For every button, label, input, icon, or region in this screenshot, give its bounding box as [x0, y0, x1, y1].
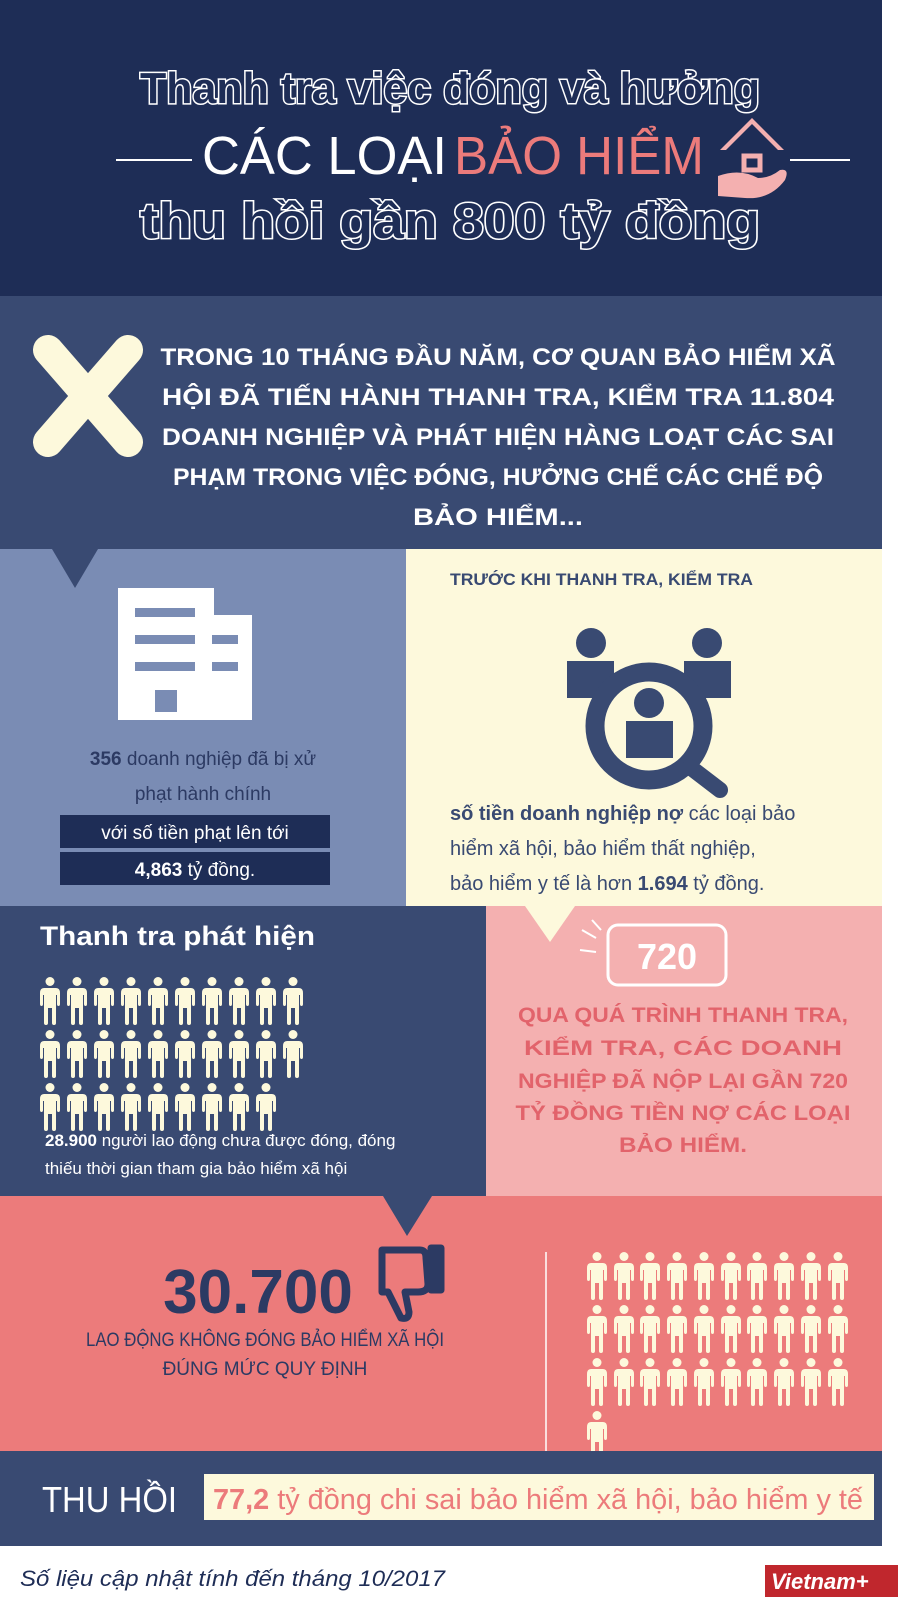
icon: house in hand [718, 118, 787, 198]
intro text: DOANH NGHIỆP VÀ PHÁT HIỆN HÀNG LOẠT CÁC SAI [162, 423, 834, 451]
description: LAO ĐỘNG KHÔNG ĐÓNG BẢO HIỂM XÃ HỘI [86, 1329, 444, 1351]
intro text [160, 342, 836, 531]
title line 1: Thanh tra việc đóng và hưởng [140, 64, 760, 113]
panel: 30.700 workers [0, 1196, 882, 1460]
panel: before inspection [406, 549, 882, 906]
720 box [580, 920, 726, 985]
720 text [516, 1004, 850, 1157]
intro text: HỘI ĐÃ TIẾN HÀNH THANH TRA, KIỂM TRA 11.804 [162, 383, 835, 411]
debt text [450, 803, 795, 895]
720 text: QUA QUÁ TRÌNH THANH TRA, [518, 1004, 848, 1027]
people pictogram 29 [40, 977, 303, 1131]
debt text: số tiền doanh nghiệp nợ các loại bảo [450, 803, 795, 825]
title line 3: thu hồi gần 800 tỷ đồng [140, 193, 760, 249]
recovered amount box: 77,2 tỷ đồng chi sai bảo hiểm xã hội, bảo hiểm y tế [213, 1484, 863, 1516]
fines text: 4,863 tỷ đồng. [135, 860, 255, 881]
intro panel [0, 296, 882, 549]
intro text: BẢO HIỂM... [413, 502, 583, 531]
description: ĐÚNG MỨC QUY ĐỊNH [163, 1358, 367, 1380]
panel: inspection found [0, 906, 486, 1196]
720 text: KIỂM TRA, CÁC DOANH [524, 1037, 842, 1060]
header panel [0, 0, 882, 296]
icon: thumbs down [382, 1248, 441, 1318]
text 28.900 [45, 1131, 395, 1178]
logo Vietnam+: Vietnam+ [771, 1569, 869, 1594]
panel: recovered [0, 1451, 882, 1546]
panel: 720 repaid [486, 906, 882, 1196]
recovered amount box [204, 1474, 874, 1520]
720 text: BẢO HIỂM. [619, 1134, 747, 1157]
720 text: TỶ ĐỒNG TIỀN NỢ CÁC LOẠI [516, 1101, 850, 1125]
icon: magnifier people [567, 628, 731, 790]
fines text: với số tiền phạt lên tới [101, 823, 289, 844]
label THU HỒI: THU HỒI [42, 1478, 177, 1520]
title line 2: BẢO HIỂM [454, 126, 704, 186]
logo Vietnam+ [765, 1565, 898, 1597]
text 28.900: 28.900 người lao động chưa được đóng, đóng [45, 1131, 395, 1150]
heading: Thanh tra phát hiện [40, 921, 315, 951]
fines text: phạt hành chính [135, 784, 271, 805]
icon: building [118, 588, 252, 720]
icon: X [48, 350, 128, 442]
heading: TRƯỚC KHI THANH TRA, KIỂM TRA [450, 570, 753, 589]
text 28.900: thiếu thời gian tham gia bảo hiểm xã hội [45, 1159, 347, 1178]
intro text: PHẠM TRONG VIỆC ĐÓNG, HƯỞNG CHẾ CÁC CHẾ ĐỘ [173, 462, 823, 491]
intro text: TRONG 10 THÁNG ĐẦU NĂM, CƠ QUAN BẢO HIỂM XÃ [160, 342, 836, 371]
fines text: 356 doanh nghiệp đã bị xử [90, 749, 316, 770]
title line 2: CÁC LOẠI [202, 126, 447, 186]
fines text [60, 749, 330, 885]
title line 2 [116, 126, 850, 186]
720 text: NGHIỆP ĐÃ NỘP LẠI GẦN 720 [518, 1069, 848, 1093]
footer note: Số liệu cập nhật tính đến tháng 10/2017 [20, 1566, 446, 1591]
panel: fines [0, 549, 406, 906]
debt text: hiểm xã hội, bảo hiểm thất nghiệp, [450, 838, 756, 860]
720 box: 720 [637, 936, 697, 977]
debt text: bảo hiểm y tế là hơn 1.694 tỷ đồng. [450, 873, 764, 895]
description [86, 1329, 444, 1380]
people pictogram 31 [587, 1252, 848, 1459]
big number: 30.700 [163, 1258, 353, 1327]
